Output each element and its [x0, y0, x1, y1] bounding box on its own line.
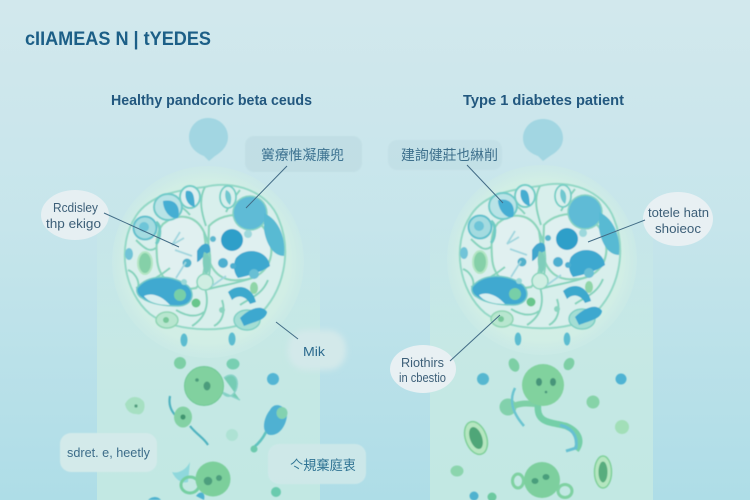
pale glow circle — [447, 165, 637, 355]
callout: right ellipse: totele hatn — [648, 206, 709, 220]
callout: milk — [276, 322, 346, 370]
heading: healthy: Healthy pandcoric beta ceuds — [111, 92, 312, 109]
callout: milk: Mik — [303, 345, 326, 359]
title: cIIAMEAS N | tYEDES — [25, 29, 211, 50]
callout: top right chinese label: 建詢健莊也綝削 — [401, 147, 498, 163]
callout: top left chinese label — [245, 136, 362, 208]
callout: lower left label: sdret. e, heetly — [67, 446, 151, 460]
callout: lower left label — [60, 433, 157, 472]
icon: speech drop — [523, 119, 563, 161]
panel: healthy pancreatic beta cells — [97, 92, 320, 500]
cell cluster — [125, 185, 285, 330]
heading: type 1: Type 1 diabetes patient — [463, 92, 624, 109]
callout: right ellipse: shoieoc — [655, 222, 701, 236]
light column — [97, 170, 320, 500]
floating cells — [450, 332, 629, 500]
callout: lower chinese label — [268, 444, 366, 484]
light column — [430, 170, 653, 500]
floating cells — [125, 332, 288, 500]
cell cluster — [460, 184, 620, 329]
callout: left ellipse: thp ekigo — [46, 217, 101, 231]
callout: lower chinese label: 亽規棄庭衷 — [290, 457, 356, 473]
panel: type 1 diabetes patient — [430, 92, 653, 500]
callout: lower right ellipse — [390, 315, 500, 393]
callout: top right chinese label — [388, 140, 503, 203]
icon: speech drop — [189, 118, 228, 161]
pale glow circle — [112, 166, 304, 358]
callout: top left chinese label: 黉療惟凝廉兜 — [261, 147, 344, 163]
callout: left ellipse: Rcdisley — [53, 201, 99, 215]
callout: right ellipse — [588, 192, 713, 246]
callout: lower right ellipse: Riothirs — [401, 356, 444, 370]
callout: lower right ellipse: in cbestio — [399, 371, 446, 385]
callout: left ellipse — [41, 190, 179, 247]
